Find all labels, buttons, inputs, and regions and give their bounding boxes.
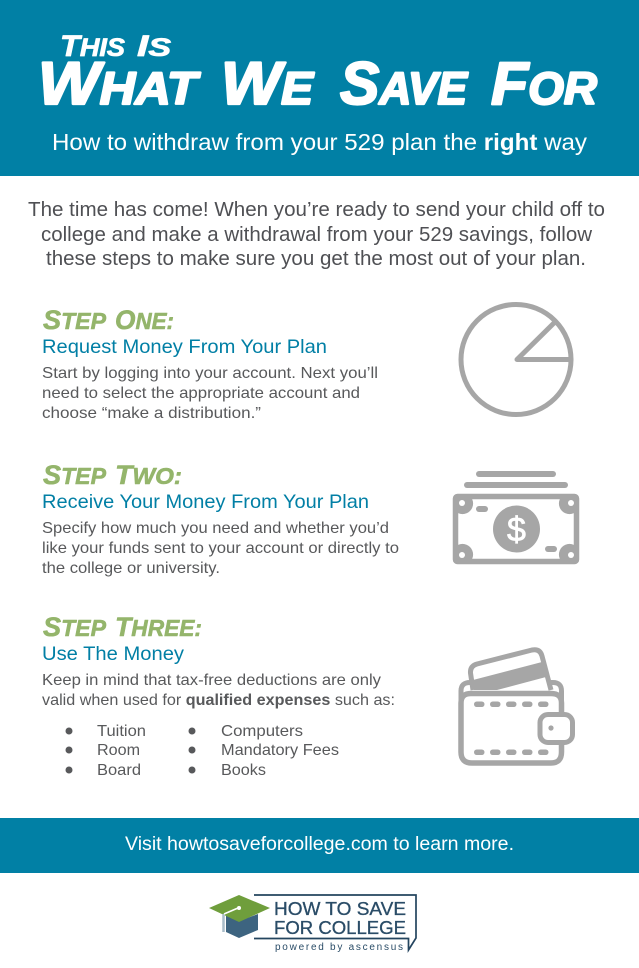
- clasp: [540, 714, 572, 742]
- step one heading: Request Money From Your Plan: [42, 336, 327, 358]
- logo wordmark: HOW TO SAVE: [274, 898, 406, 919]
- intro paragraph: [28, 199, 605, 270]
- step two label: TWO:: [115, 460, 182, 490]
- intro paragraph: these steps to make sure you get the most out of your plan.: [46, 248, 586, 270]
- step three label: THREE:: [115, 612, 202, 642]
- title: this is: IS: [137, 30, 171, 63]
- wallet back flaps: [461, 682, 562, 700]
- step two body: like your funds sent to your account or directly to: [42, 540, 399, 557]
- step two label: STEP: [43, 460, 107, 490]
- step three body: valid when used for qualified expenses such as:: [42, 692, 395, 709]
- title: what we save for: WE: [221, 50, 315, 117]
- subtitle: How to withdraw from your 529 plan the right way: [52, 129, 587, 155]
- step one body: Start by logging into your account. Next you’ll: [42, 365, 378, 382]
- card outline: [470, 650, 551, 690]
- step three label: STEP: [43, 612, 107, 642]
- title: what we save for: WHAT: [38, 50, 201, 117]
- step one body: choose “make a distribution.”: [42, 405, 261, 422]
- expense list: Mandatory Fees: [221, 742, 339, 759]
- icon: wallet: [461, 650, 572, 763]
- step one label: ONE:: [115, 305, 174, 335]
- title: this is: THIS: [60, 30, 125, 63]
- logo frame: [254, 895, 416, 950]
- step one label: [43, 305, 174, 335]
- logo: how to save for college: FOR COLLEGE: [274, 917, 406, 938]
- card stripe: [473, 662, 546, 690]
- step three body: Keep in mind that tax-free deductions are only: [42, 672, 381, 689]
- title: what we save for: [38, 50, 598, 117]
- step three body: [42, 672, 395, 709]
- expense list: [66, 723, 339, 779]
- expense list: Tuition: [97, 723, 146, 740]
- logo: how to save for college: powered by ascensus: [275, 942, 403, 953]
- step two body: the college or university.: [42, 560, 220, 577]
- panel: step two: [42, 460, 399, 577]
- title: what we save for: SAVE: [340, 50, 469, 117]
- step two body: Specify how much you need and whether you’d: [42, 520, 389, 537]
- step two body: [42, 520, 399, 577]
- panel: header banner: [0, 0, 639, 176]
- step three label: [43, 612, 202, 642]
- expense list: Board: [97, 762, 141, 779]
- step one label: STEP: [43, 305, 107, 335]
- step one body: need to select the appropriate account and: [42, 385, 360, 402]
- icon: money: $: [507, 511, 526, 549]
- panel: footer call to action: Visit howtosaveforcollege.com to learn more.: [125, 834, 514, 855]
- icon: money: [455, 471, 577, 562]
- wallet front: [461, 694, 562, 763]
- panel: footer call to action: [0, 818, 639, 873]
- panel: step one: [42, 305, 378, 422]
- expense list: Computers: [221, 723, 303, 740]
- title: what we save for: FOR: [491, 50, 598, 117]
- icon: pie chart: [461, 304, 571, 414]
- panel: step three: [42, 612, 395, 779]
- intro paragraph: The time has come! When you’re ready to send your child off to: [28, 199, 605, 221]
- logo: how to save for college: [209, 895, 416, 953]
- step two heading: Receive Your Money From Your Plan: [42, 491, 369, 513]
- expense list: Room: [97, 742, 140, 759]
- step one body: [42, 365, 378, 422]
- title: this is: [60, 30, 171, 63]
- expense list: Books: [221, 762, 266, 779]
- step two label: [43, 460, 182, 490]
- intro paragraph: college and make a withdrawal from your 529 savings, follow: [41, 224, 593, 246]
- icon: graduation cap: [209, 895, 270, 938]
- stitches: [474, 702, 548, 755]
- step three heading: Use The Money: [42, 643, 184, 665]
